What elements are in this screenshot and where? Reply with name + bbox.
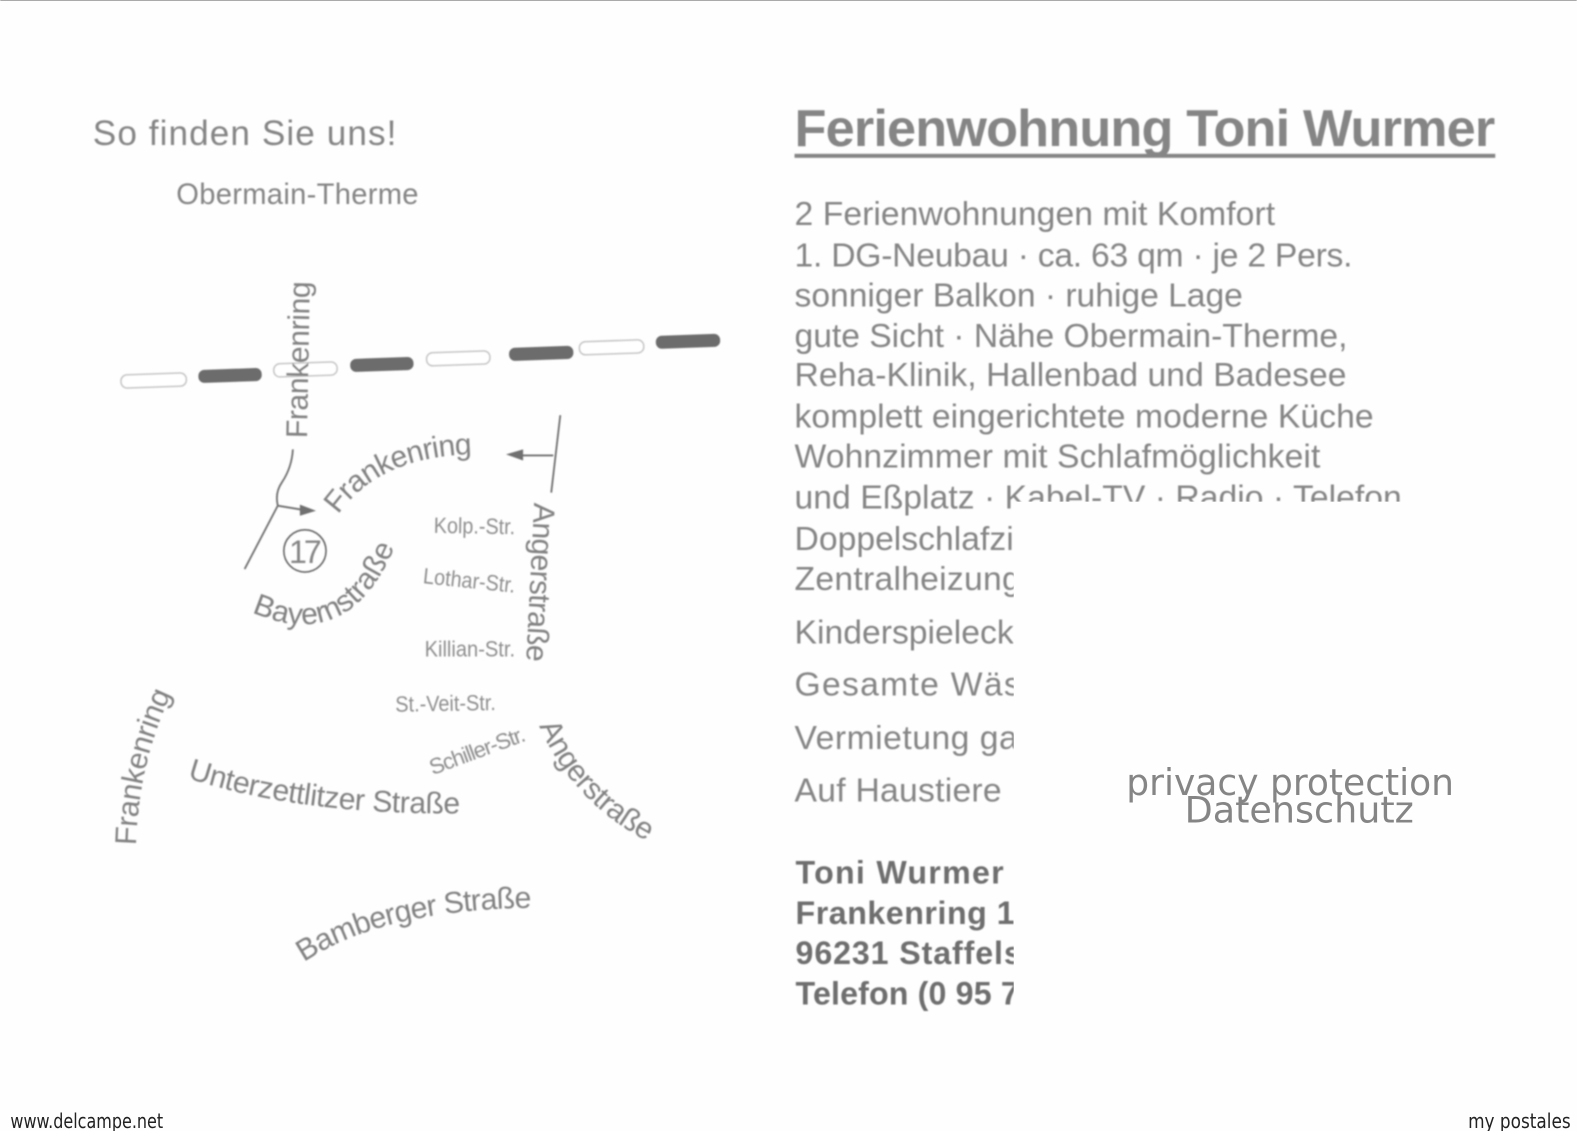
feature list: und Eßplatz · Kabel-TV · Radio · Telefon [795,480,1402,517]
railway line [121,334,720,388]
watermark: Datenschutz: Datenschutz [1185,788,1414,831]
street: Killian-Str: Killian-Str. [425,636,515,661]
street: St-Veit-Str: St.-Veit-Str. [395,690,496,717]
route arrow from Angerstrasse [506,415,560,493]
title: Ferienwohnung Toni Wurmer [795,100,1495,158]
feature list: Vermietung ga [795,720,1018,757]
label: Obermain-Therme: Obermain-Therme [176,179,419,211]
street: Unterzettlitzer Strasse: Unterzettlitzer Straße [190,758,460,815]
feature list: 2 Ferienwohnungen mit Komfort [795,196,1276,233]
feature list: Reha-Klinik, Hallenbad und Badesee [795,357,1346,394]
title underline [795,154,1495,158]
street: Bamberger Strasse: Bamberger Straße [294,886,531,962]
feature list: Doppelschlafzi [795,521,1014,558]
watermark: privacy protection: privacy protection [1126,761,1454,804]
contact address [796,855,1022,1011]
contact address: Telefon (0 95 7 [796,975,1019,1011]
contact address: Toni Wurmer [796,855,1004,891]
feature list: Gesamte Wäs [795,667,1021,704]
street: Angerstrasse lower: Angerstraße [538,724,652,840]
street: Frankenring vertical: Frankenring [285,282,317,437]
panel: apartment description [795,100,1495,1011]
street: Lothar-Str: Lothar-Str. [422,563,517,598]
feature list: Zentralheizung [795,561,1021,598]
feature list: komplett eingerichtete moderne Küche [795,398,1374,435]
feature list: gute Sicht · Nähe Obermain-Therme, [795,318,1347,355]
street: Angerstrasse upper: Angerstraße [524,502,556,662]
route arrow from Frankenring [245,449,316,569]
street: Schiller-Str: Schiller-Str. [429,730,526,774]
panel: map and directions [93,114,722,962]
feature list [795,196,1402,809]
street: Bayernstrasse: Bayernstraße [253,542,394,631]
feature list: Wohnzimmer mit Schlafmöglichkeit [795,438,1321,475]
marker: house number 17 [284,530,326,572]
street: Frankenring curved: Frankenring [322,434,471,514]
heading: so finden sie uns: So finden Sie uns! [93,114,396,153]
feature list: Auf Haustiere [795,772,1002,809]
feature list: 1. DG-Neubau · ca. 63 qm · je 2 Pers. [795,237,1352,274]
street: Frankenring left: Frankenring [114,688,175,844]
street: Kolp-Str: Kolp.-Str. [434,513,515,539]
privacy mask [1014,502,1428,1015]
feature list: Kinderspieleck [795,614,1014,651]
marker: house number 17: 17 [289,534,321,570]
contact address: Frankenring 1 [796,895,1015,931]
feature list: sonniger Balkon · ruhige Lage [795,278,1243,315]
contact address: 96231 Staffels [796,935,1022,971]
